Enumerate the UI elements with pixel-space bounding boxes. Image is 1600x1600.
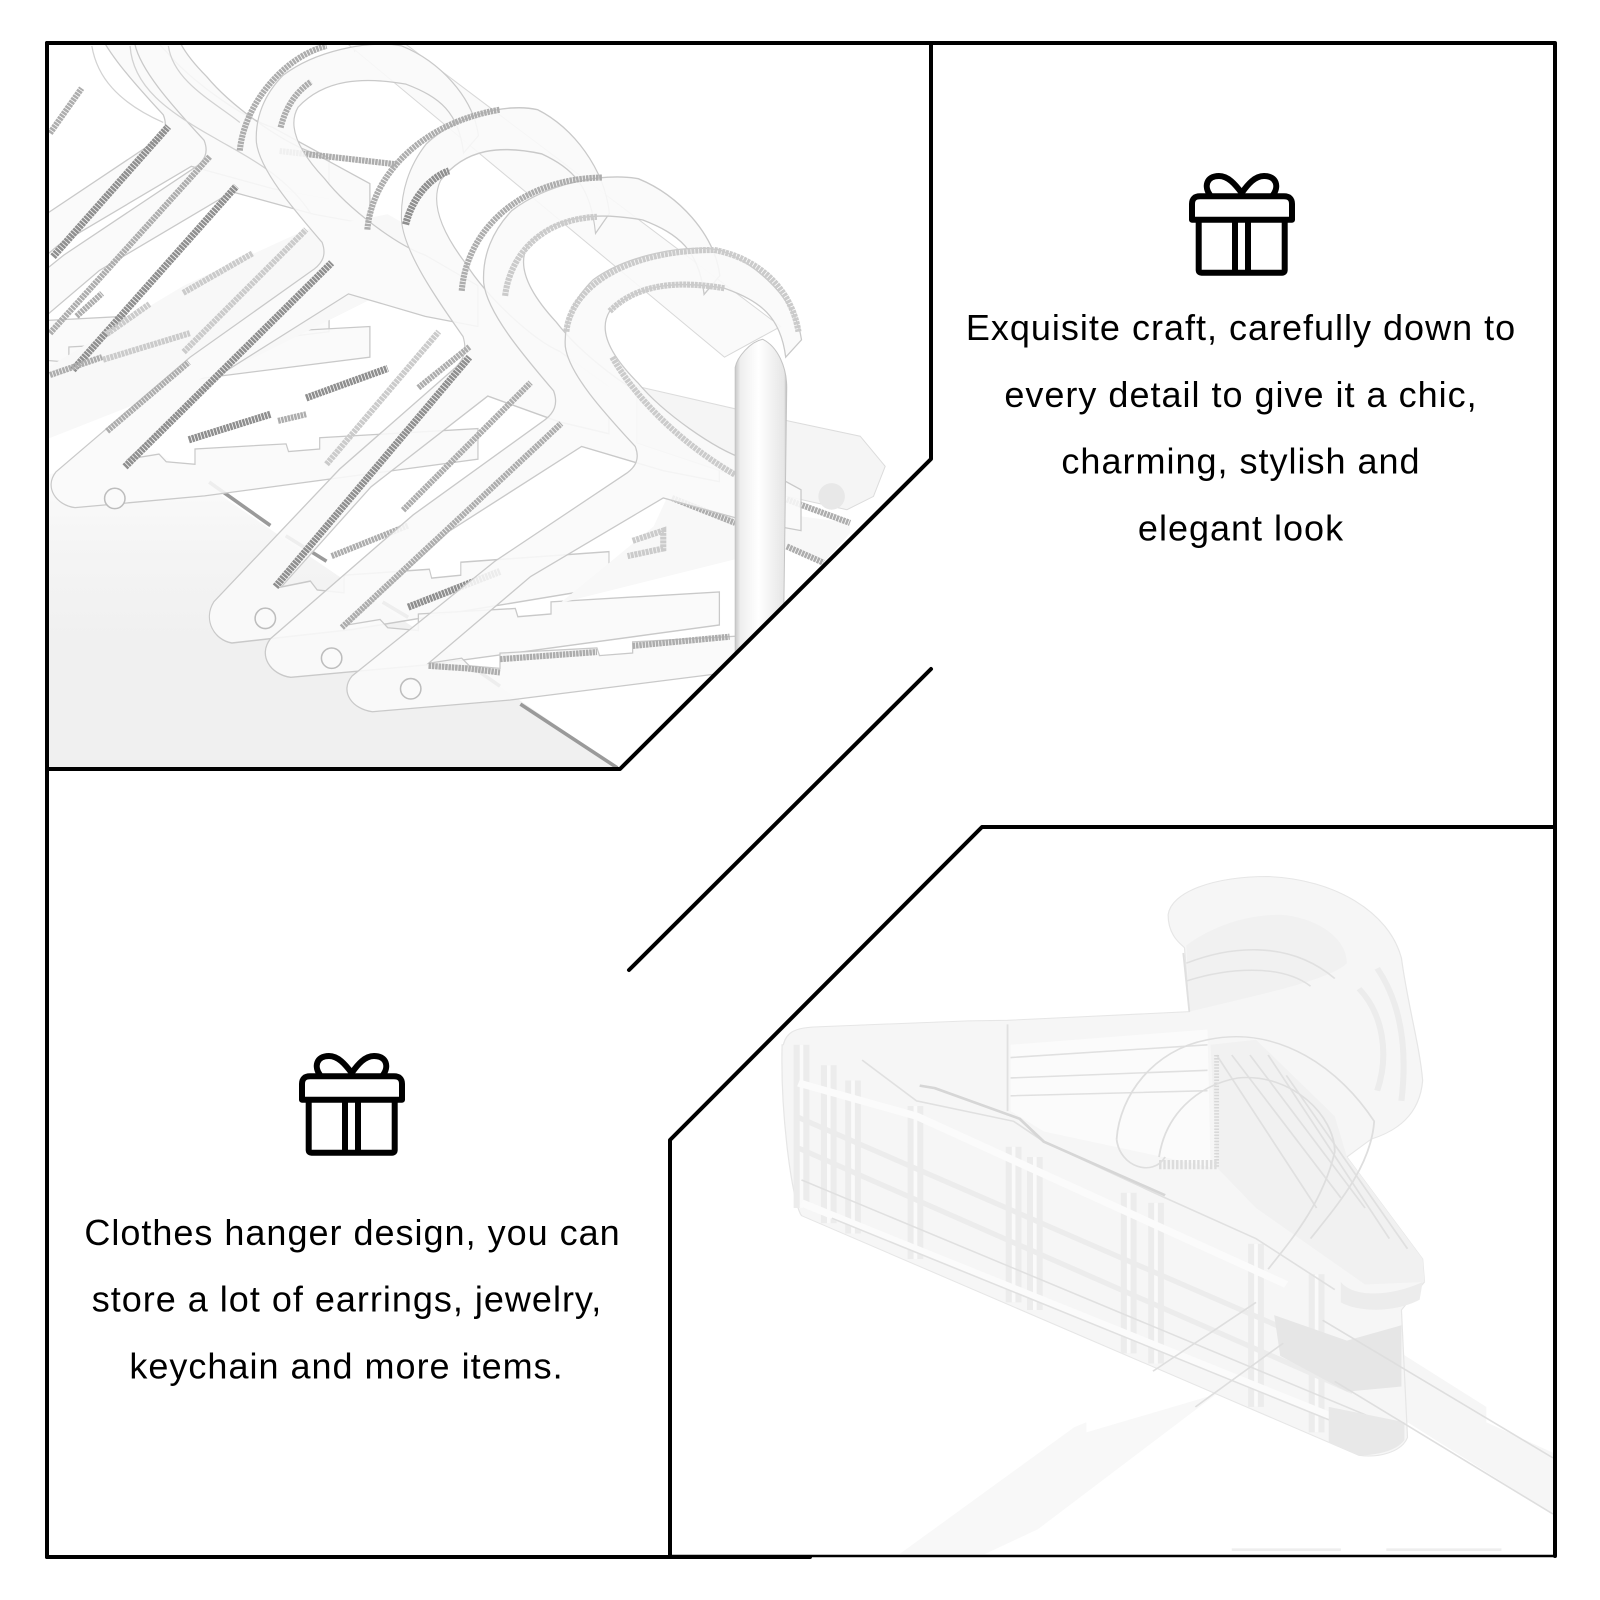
clear acrylic rod running through hooks [332,31,781,357]
hangers at the back, upper left [49,45,396,378]
hanger 4 [51,44,478,509]
text: bottom left description: store a lot of earrings, jewelry, [92,1278,602,1320]
panel: top-left hanger photo [0,0,885,769]
hanger 2 [265,177,720,677]
free diagonal line [629,669,931,970]
right arms behind front hanger [560,386,885,603]
text: top right description: elegant look [1138,508,1344,548]
text: top right description: Exquisite craft, carefully down to [966,307,1516,348]
text: top right description: every detail to give it a chic, [1004,374,1478,415]
hook interior [1182,949,1406,1101]
rod: vertical bend [735,339,787,658]
leg edge lines over body [1153,1302,1553,1514]
panel: bottom-right stacked hangers photo [782,876,1553,1555]
ring outlines of hooks [1117,1037,1374,1269]
shoulder inner panel [1006,1024,1208,1111]
text: bottom left description: keychain and more items. [129,1346,564,1386]
hanger 3 [209,108,609,643]
front hanger [347,248,802,712]
floor with glass edge [49,481,618,767]
front arm triangle with ribs [1159,1040,1424,1284]
stacked body [782,876,1424,1456]
text: top right description: charming, stylish and [1061,440,1421,482]
icon: gift bottom [302,1056,402,1153]
text: bottom left description: Clothes hanger design, you can [84,1212,621,1253]
icon: gift top [1192,176,1292,273]
text: top right description [966,307,1516,548]
shaded lower stack near tip [1274,1282,1423,1455]
long body bands [795,1045,1395,1432]
text: bottom left description [84,1212,621,1386]
lower hanger legs [1232,1356,1552,1551]
